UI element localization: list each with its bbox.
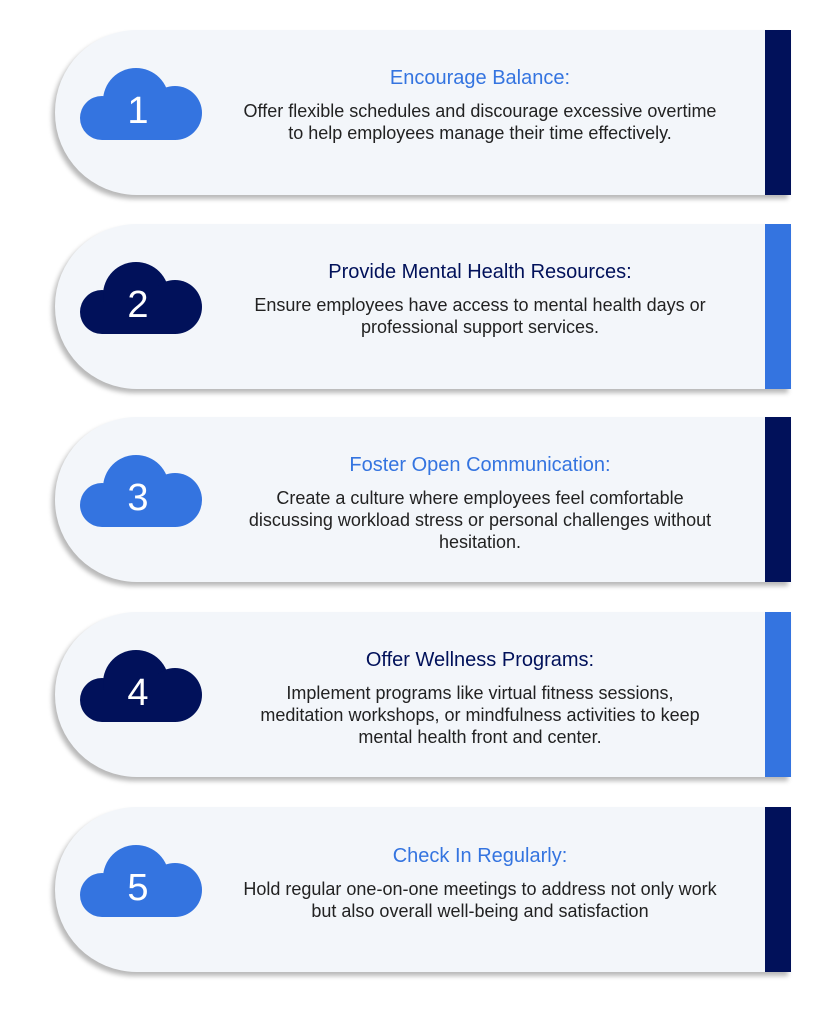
text 4 (260, 649, 700, 747)
text 3 (249, 454, 711, 552)
text 3: hesitation. (439, 532, 521, 552)
card 5 (55, 807, 791, 972)
icon: cloud 5: 5 (127, 867, 149, 909)
text 2: professional support services. (361, 317, 599, 337)
icon: cloud 4: 4 (127, 672, 149, 714)
text 1 (244, 67, 716, 143)
text 4: Offer Wellness Programs: (366, 649, 594, 671)
text 5: Check In Regularly: (393, 845, 567, 867)
icon: cloud 3: 3 (127, 477, 149, 519)
icon: cloud 1: 1 (127, 90, 149, 132)
text 3: discussing workload stress or personal challenges without (249, 510, 711, 530)
text 4: mental health front and center. (358, 727, 602, 747)
icon: cloud 5 (80, 845, 202, 917)
text 5: but also overall well-being and satisfaction (311, 901, 649, 921)
text 5 (243, 845, 717, 921)
icon: cloud 2 (80, 262, 202, 334)
text 4: meditation workshops, or mindfulness activities to keep (260, 705, 700, 725)
text 2: Provide Mental Health Resources: (328, 261, 632, 283)
icon: cloud 1 (80, 68, 202, 140)
text 4: Implement programs like virtual fitness sessions, (286, 683, 674, 703)
text 1: Offer flexible schedules and discourage excessive overtime (244, 101, 716, 121)
text 1: to help employees manage their time effectively. (288, 123, 672, 143)
card 3 (55, 417, 791, 582)
text 5: Hold regular one-on-one meetings to address not only work (243, 879, 717, 899)
icon: cloud 3 (80, 455, 202, 527)
text 2 (254, 261, 706, 337)
text 3: Create a culture where employees feel comfortable (276, 488, 684, 508)
bar 4 (765, 612, 791, 777)
bar 3 (765, 417, 791, 582)
bar 1 (765, 30, 791, 195)
text 2: Ensure employees have access to mental health days or (254, 295, 706, 315)
icon: cloud 2: 2 (127, 284, 149, 326)
card 1 (55, 30, 791, 195)
icon: cloud 4 (80, 650, 202, 722)
text 1: Encourage Balance: (390, 67, 570, 89)
text 3: Foster Open Communication: (349, 454, 611, 476)
bar 5 (765, 807, 791, 972)
card 2 (55, 224, 791, 389)
card 4 (55, 612, 791, 777)
bar 2 (765, 224, 791, 389)
